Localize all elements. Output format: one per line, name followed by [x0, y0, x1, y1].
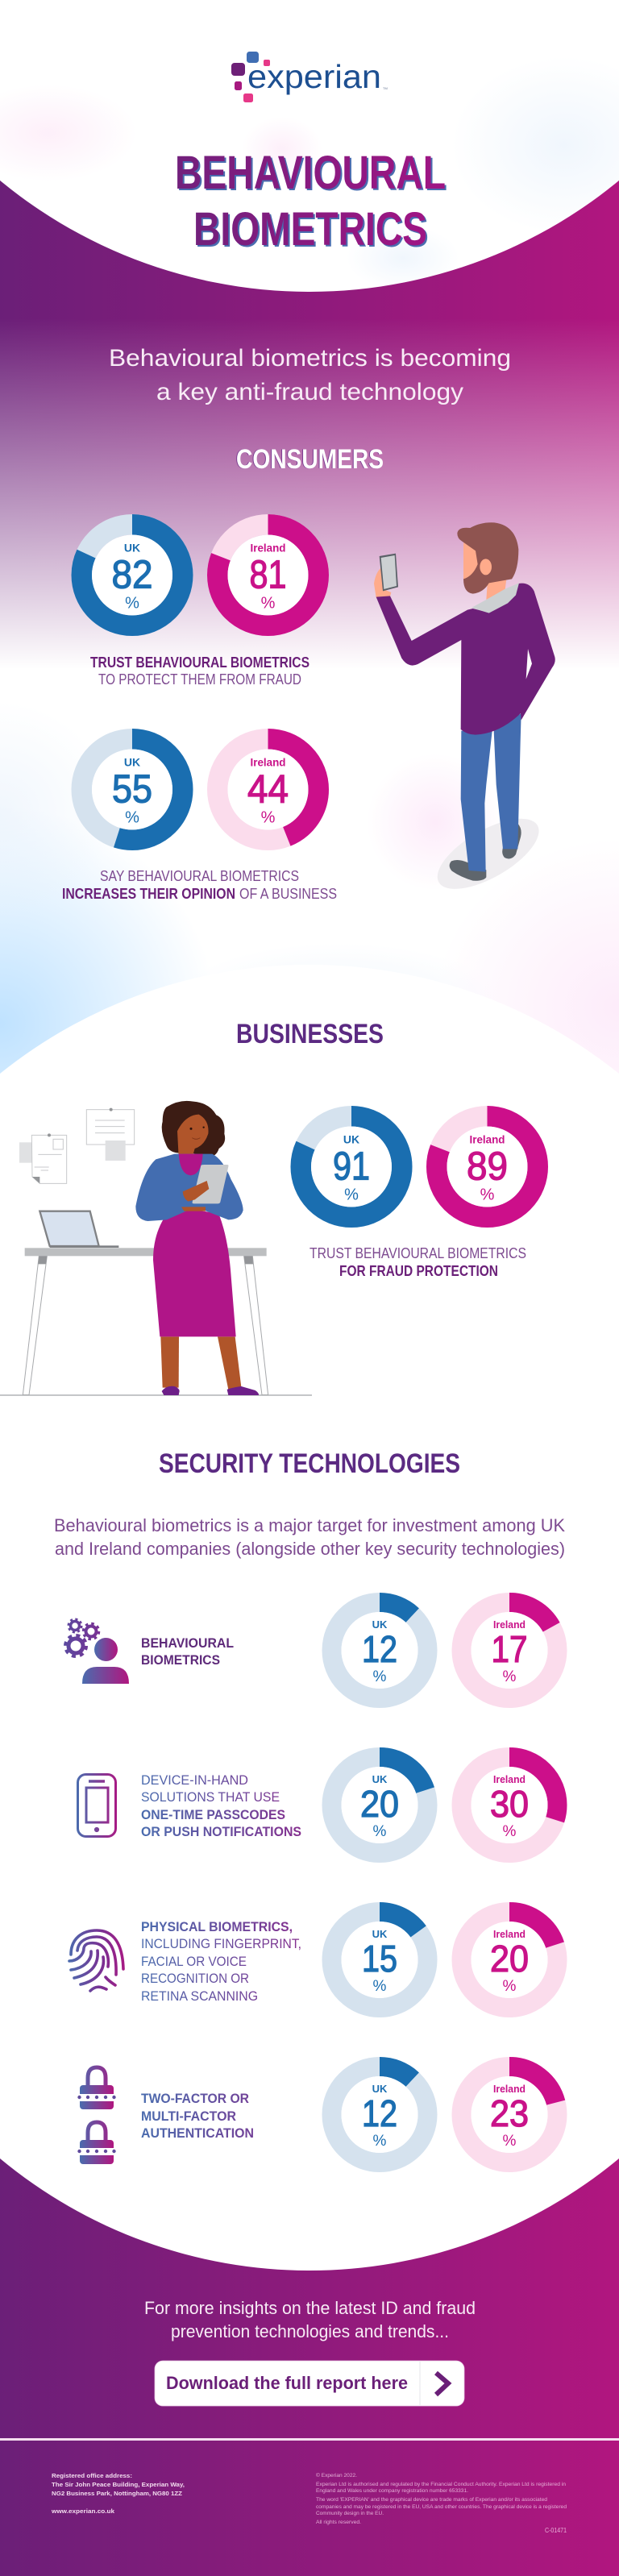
- donut: UK 82% trust: UK: [124, 542, 140, 555]
- white central section: [0, 965, 619, 2271]
- title: BIOMETRICS: [193, 203, 427, 256]
- button: download report: [155, 2361, 464, 2406]
- caption: opinion: OF A BUSINESS: [239, 885, 337, 902]
- donut: UK 12% two-factor: [332, 2067, 427, 2163]
- row label: device-in-hand: ONE-TIME PASSCODES: [141, 1808, 285, 1822]
- donut: UK 55% opinion: UK: [124, 756, 140, 769]
- row label: behavioural biometrics: BEHAVIOURAL: [141, 1636, 234, 1651]
- call to action text: For more insights on the latest ID and fraud: [144, 2298, 476, 2318]
- intro text: Behavioural biometrics is becoming: [109, 345, 511, 372]
- donut: UK 20% device: [332, 1757, 427, 1853]
- row label: two-factor: AUTHENTICATION: [141, 2126, 254, 2141]
- donut: UK 12% behavioural: UK: [372, 1618, 388, 1631]
- caption: fraud protection: FOR FRAUD PROTECTION: [339, 1262, 498, 1279]
- donut: Ireland 23% two-factor: Ireland: [493, 2083, 526, 2095]
- icon: fingerprint: [69, 1930, 123, 1991]
- caption: trust: TRUST BEHAVIOURAL BIOMETRICS: [90, 654, 310, 671]
- donut: UK 55% opinion: [81, 739, 183, 840]
- security intro text: and Ireland companies (alongside other key security technologies): [55, 1539, 565, 1559]
- donut: Ireland 89% business: %: [480, 1186, 495, 1204]
- row label: device-in-hand: OR PUSH NOTIFICATIONS: [141, 1825, 301, 1839]
- row label: device-in-hand: [141, 1773, 301, 1839]
- footer: address: [51, 2472, 185, 2515]
- caption: trust: TO PROTECT THEM FROM FRAUD: [98, 671, 301, 688]
- row label: physical biometrics: FACIAL OR VOICE: [141, 1955, 247, 1969]
- donut: Ireland 23% two-factor: [461, 2067, 558, 2163]
- donut: UK 82% trust: 82: [111, 553, 153, 596]
- donut: Ireland 20% physical: %: [503, 1978, 517, 1995]
- footer: address: www.experian.co.uk: [51, 2507, 115, 2515]
- call to action text: prevention technologies and trends...: [171, 2321, 449, 2341]
- donut: Ireland 20% physical: Ireland: [493, 1928, 526, 1940]
- donut: UK 20% device: UK: [372, 1773, 388, 1785]
- heading: security technologies: SECURITY TECHNOLOGIES: [159, 1448, 460, 1479]
- donut: Ireland 20% physical: 20: [490, 1938, 529, 1980]
- row label: physical biometrics: RETINA SCANNING: [141, 1989, 258, 2004]
- donut: UK 55% opinion: 55: [112, 767, 152, 811]
- logo: Experian: experian: [247, 58, 381, 95]
- donut: Ireland 17% behavioural: [461, 1602, 558, 1698]
- donut: UK 55% opinion: %: [125, 809, 139, 827]
- footer: legal text: [316, 2472, 567, 2534]
- illustration: man with phone: [374, 522, 555, 903]
- donut: Ireland 89% business: Ireland: [469, 1133, 505, 1146]
- logo: Experian: TM: [383, 86, 388, 90]
- footer: legal text: © Experian 2022.: [316, 2472, 357, 2478]
- donut: UK 91% business: %: [344, 1186, 359, 1204]
- footer: legal text: The word 'EXPERIAN' and the graphical device are trade marks of Experian and/or its associated: [316, 2497, 547, 2503]
- donut: Ireland 30% device: Ireland: [493, 1773, 526, 1785]
- donut: Ireland 30% device: [461, 1757, 558, 1853]
- donut: Ireland 81% trust: [218, 525, 318, 625]
- divider line: [0, 2438, 619, 2441]
- donut: Ireland 81% trust: %: [261, 595, 276, 613]
- donut: UK 15% physical: %: [373, 1978, 387, 1995]
- donut: Ireland 23% two-factor: 23: [490, 2092, 529, 2134]
- donut: Ireland 44% opinion: %: [261, 809, 276, 827]
- bottom purple band: [0, 2096, 619, 2576]
- logo: Experian: [231, 52, 388, 102]
- row label: two-factor: MULTI-FACTOR: [141, 2109, 236, 2124]
- donut: UK 15% physical: [332, 1912, 427, 2008]
- footer: legal text: C-01471: [545, 2527, 567, 2534]
- donut: UK 12% behavioural: %: [373, 1668, 387, 1685]
- donut: Ireland 17% behavioural: Ireland: [493, 1618, 526, 1631]
- donut: UK 12% behavioural: 12: [362, 1628, 397, 1670]
- donut: Ireland 20% physical: [461, 1912, 558, 2008]
- icon: smartphone: [77, 1775, 116, 1836]
- security intro text: [54, 1515, 565, 1559]
- intro text: a key anti-fraud technology: [156, 379, 463, 405]
- call to action text: [144, 2298, 476, 2341]
- donut: UK 91% business: 91: [333, 1145, 370, 1188]
- donut: UK 15% physical: UK: [372, 1928, 388, 1940]
- footer: legal text: England and Wales under company registration number 653331.: [316, 2488, 468, 2494]
- header white dome: [0, 105, 619, 292]
- donut: UK 20% device: 20: [360, 1783, 399, 1825]
- caption: trust: [90, 654, 310, 688]
- donut: UK 82% trust: %: [125, 595, 139, 613]
- donut: Ireland 44% opinion: 44: [247, 767, 289, 811]
- caption: opinion: SAY BEHAVIOURAL BIOMETRICS: [100, 867, 299, 884]
- heading: businesses: BUSINESSES: [236, 1019, 384, 1049]
- row label: physical biometrics: INCLUDING FINGERPRINT,: [141, 1937, 301, 1951]
- footer: legal text: All rights reserved.: [316, 2520, 361, 2525]
- caption: fraud protection: TRUST BEHAVIOURAL BIOMETRICS: [310, 1244, 526, 1261]
- donut: Ireland 89% business: 89: [467, 1145, 508, 1188]
- row label: physical biometrics: PHYSICAL BIOMETRICS,: [141, 1920, 293, 1934]
- security intro text: Behavioural biometrics is a major target for investment among UK: [54, 1515, 565, 1535]
- illustration: woman at desk with tablet: [0, 1101, 312, 1396]
- donut: Ireland 17% behavioural: %: [503, 1668, 517, 1685]
- footer: legal text: Community design in the EU.: [316, 2511, 384, 2516]
- donut: Ireland 30% device: %: [503, 1823, 517, 1840]
- donut: UK 12% behavioural: [332, 1602, 427, 1698]
- purple gradient band fading to white: [0, 161, 619, 671]
- row label: behavioural biometrics: BIOMETRICS: [141, 1653, 220, 1668]
- donut: Ireland 30% device: 30: [490, 1783, 529, 1825]
- icon: gears and person: [65, 1619, 129, 1684]
- row label: device-in-hand: SOLUTIONS THAT USE: [141, 1790, 280, 1805]
- icon: two padlocks: [77, 2067, 117, 2164]
- donut: UK 20% device: %: [373, 1823, 387, 1840]
- row label: behavioural biometrics: [141, 1636, 234, 1668]
- donut: UK 91% business: [301, 1116, 402, 1217]
- donut: Ireland 89% business: [437, 1116, 538, 1217]
- footer: address: NG2 Business Park, Nottingham, NG80 1ZZ: [52, 2490, 182, 2497]
- heading: consumers: CONSUMERS: [236, 444, 384, 475]
- button: download report: Download the full report here: [166, 2373, 408, 2393]
- donut: Ireland 23% two-factor: %: [503, 2133, 517, 2150]
- footer: legal text: Experian Ltd is authorised and regulated by the Financial Conduct Authority. Experian Ltd is registered in: [316, 2482, 566, 2487]
- donut: Ireland 81% trust: Ireland: [250, 542, 285, 555]
- donut: UK 15% physical: 15: [362, 1938, 397, 1980]
- row label: two-factor: [141, 2092, 254, 2141]
- intro text: [109, 345, 511, 405]
- title: [175, 147, 446, 256]
- caption: opinion: INCREASES THEIR OPINION: [62, 885, 235, 902]
- title: BEHAVIOURAL: [175, 147, 446, 199]
- caption: fraud protection: [310, 1244, 526, 1279]
- row label: physical biometrics: RECOGNITION OR: [141, 1971, 249, 1986]
- caption: opinion: [62, 867, 337, 902]
- donut: UK 82% trust: [81, 525, 183, 625]
- donut: UK 12% two-factor: UK: [372, 2083, 388, 2095]
- donut: Ireland 81% trust: 81: [250, 553, 287, 596]
- donut: Ireland 44% opinion: Ireland: [250, 756, 285, 769]
- donut: UK 91% business: UK: [343, 1133, 359, 1146]
- row label: device-in-hand: DEVICE-IN-HAND: [141, 1773, 248, 1788]
- footer: address: The Sir John Peace Building, Experian Way,: [52, 2481, 185, 2488]
- footer: address: Registered office address:: [52, 2472, 132, 2479]
- footer: legal text: companies and may be registered in the EU, USA and other countries. The graphical device is a registered: [316, 2504, 567, 2510]
- donut: Ireland 17% behavioural: 17: [492, 1628, 527, 1670]
- row label: two-factor: TWO-FACTOR OR: [141, 2092, 249, 2106]
- donut: UK 12% two-factor: 12: [362, 2092, 397, 2134]
- donut: Ireland 44% opinion: [218, 739, 318, 840]
- row label: physical biometrics: [141, 1920, 301, 2004]
- donut: UK 12% two-factor: %: [373, 2133, 387, 2150]
- soft background blobs: [0, 701, 619, 1241]
